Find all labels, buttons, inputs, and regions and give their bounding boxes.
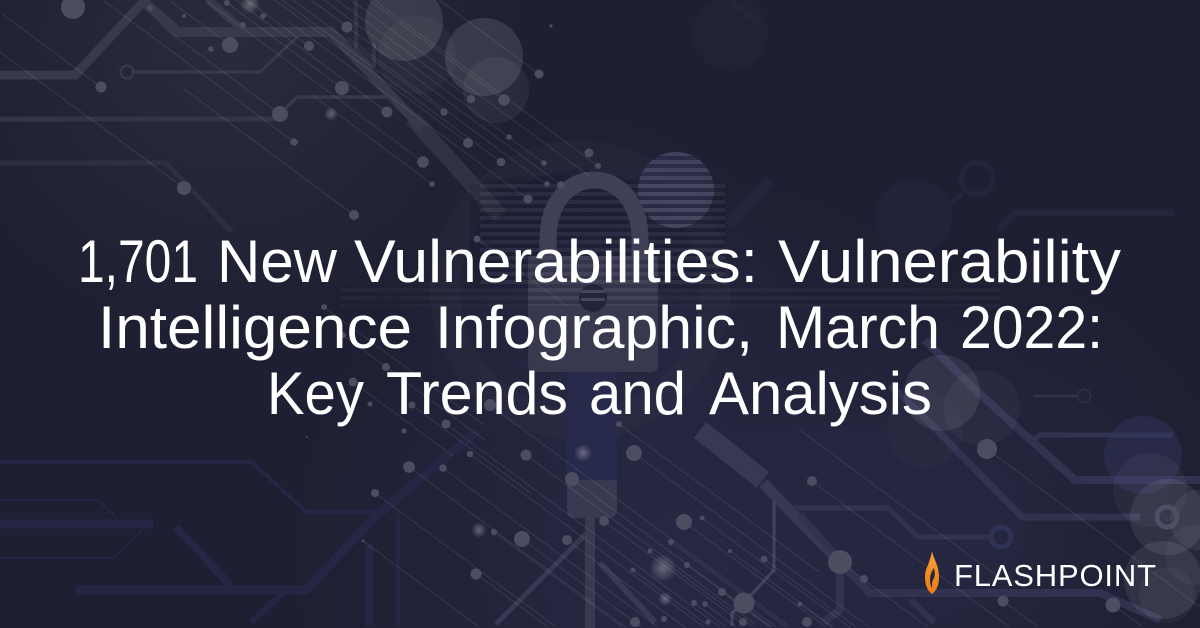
title line 3: Analysis [709, 360, 932, 427]
shackle [548, 180, 640, 272]
title line 3: and [589, 360, 686, 427]
title line 1: Vulnerability [778, 228, 1121, 295]
title line 2: 2022: [960, 294, 1103, 361]
large translucent circles: top [365, 0, 529, 123]
surrounding ring [445, 155, 715, 425]
lock stem [567, 372, 617, 518]
circuit traces: top left [0, 0, 500, 232]
title line 2: Intelligence [98, 294, 412, 361]
title [78, 228, 1121, 427]
large translucent circles: bottom right [887, 355, 1200, 623]
striped circle [638, 152, 714, 228]
connector rings [991, 390, 1177, 547]
title line 3: Trends [386, 360, 568, 427]
title line 1: Vulnerabilities: [354, 228, 758, 295]
circuit traces: bottom right [496, 340, 1200, 626]
title line 1: 1,701 [78, 228, 198, 295]
circuit traces: top right [692, 0, 1174, 255]
keyhole [579, 284, 607, 312]
title line 3 [267, 360, 932, 427]
title line 1 [78, 228, 1121, 295]
circuit traces: bottom left [0, 430, 478, 626]
light glows [240, 0, 677, 606]
icon: padlock [340, 152, 1000, 628]
striped band [470, 175, 725, 290]
icon: flame [925, 551, 939, 594]
title line 1: New [217, 228, 338, 295]
wordmark: FLASHPOINT [954, 558, 1156, 593]
lock body [528, 256, 658, 372]
title line 2 [98, 294, 1103, 361]
title line 2: Infographic, [435, 294, 753, 361]
logo: Flashpoint [925, 551, 1156, 594]
title line 3: Key [267, 360, 364, 427]
title line 2: March [776, 294, 940, 361]
